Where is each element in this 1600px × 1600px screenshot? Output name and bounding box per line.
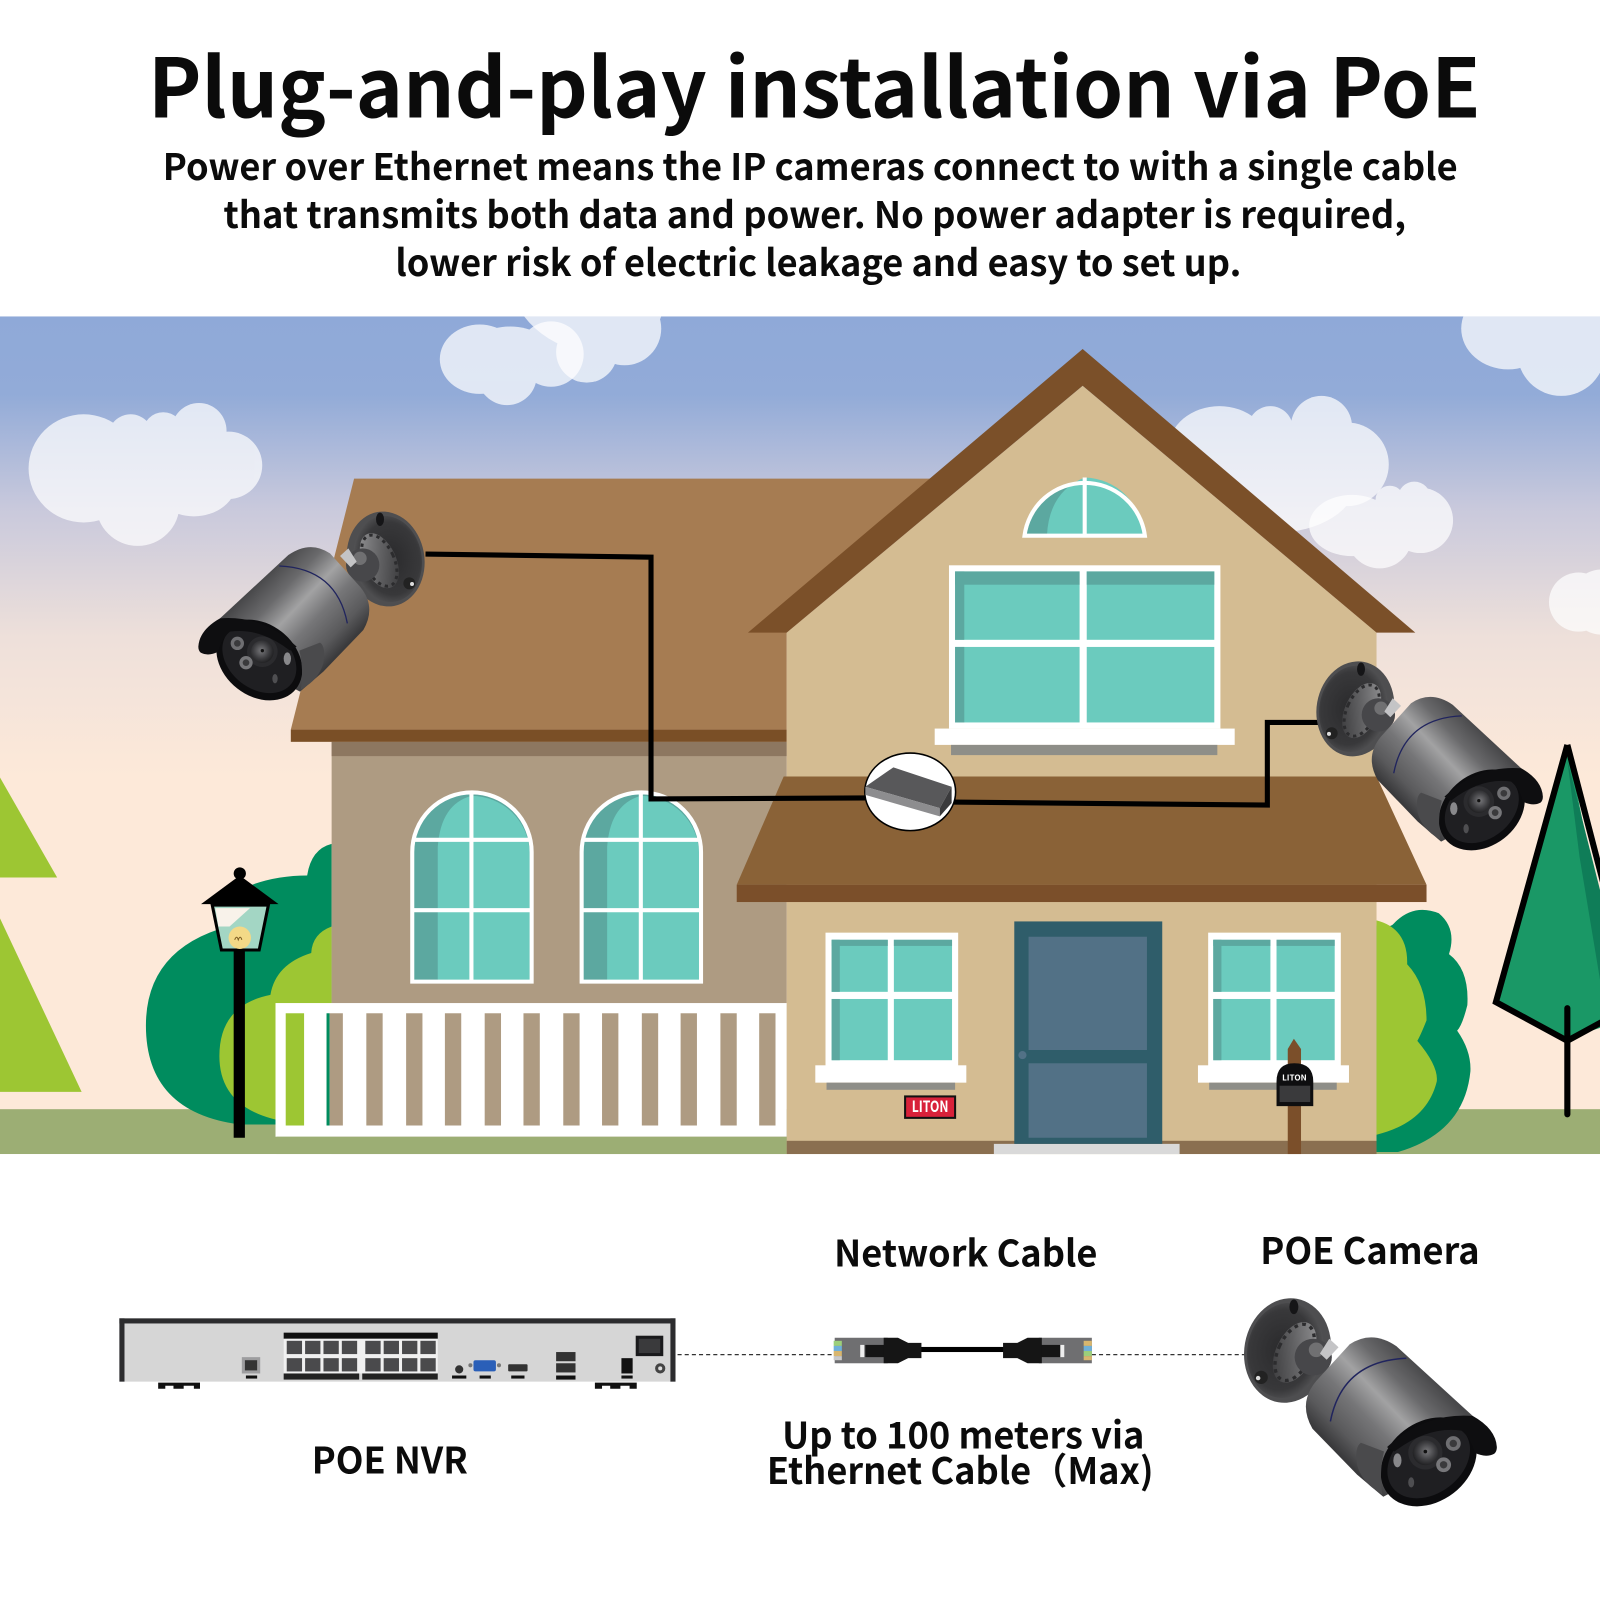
roof: rear section bbox=[291, 479, 939, 730]
half-round attic window bbox=[1024, 478, 1145, 536]
label: POE NVR: POE NVR bbox=[312, 1430, 468, 1484]
cloud: over gable bbox=[1309, 482, 1453, 568]
wall: rear section bbox=[332, 742, 787, 1109]
cable: switch to right camera bbox=[952, 722, 1321, 805]
subtitle text block: Power over Ethernet means the IP cameras connect to with a single cable bbox=[163, 137, 1458, 191]
label: network cable: Network Cable bbox=[834, 1223, 1097, 1277]
lower left window bbox=[815, 933, 966, 1090]
cloud: top centre front bbox=[440, 321, 584, 405]
switch callout bbox=[865, 753, 956, 831]
roof: gable bbox=[748, 349, 1415, 633]
tree: right bbox=[1496, 745, 1600, 1114]
device: POE NVR rear panel bbox=[119, 1318, 676, 1389]
cloud: top right bbox=[1461, 316, 1600, 396]
tree: left light green bbox=[0, 778, 82, 1092]
label: cable distance: Up to 100 meters via bbox=[782, 1405, 1144, 1459]
cloud: behind gable bbox=[1168, 396, 1389, 533]
title: Plug-and-play installation via PoE bbox=[148, 22, 1481, 141]
dashed connection lines bbox=[678, 1354, 1245, 1356]
label: POE camera: POE Camera bbox=[1260, 1221, 1480, 1275]
LITON sign: LITON bbox=[912, 1095, 948, 1117]
bush: right bbox=[1377, 910, 1470, 1152]
subtitle text block bbox=[163, 137, 1458, 287]
device: POE camera bbox=[1236, 1291, 1497, 1525]
roof: porch bbox=[737, 777, 1427, 885]
lamp post bbox=[201, 867, 279, 1138]
mailbox: LITON bbox=[1282, 1073, 1307, 1084]
camera: right bbox=[1316, 661, 1543, 850]
sky background bbox=[0, 316, 1600, 1154]
arched window 1 bbox=[412, 792, 532, 982]
lower right window bbox=[1198, 933, 1349, 1090]
cable: left camera to switch bbox=[426, 554, 867, 799]
subtitle text block: lower risk of electric leakage and easy to set up. bbox=[395, 233, 1241, 287]
mailbox bbox=[1277, 1039, 1313, 1154]
subtitle text block: that transmits both data and power. No power adapter is required, bbox=[223, 185, 1406, 239]
door bbox=[1014, 921, 1162, 1144]
wall: main house bbox=[787, 386, 1377, 786]
fence bbox=[276, 1003, 787, 1137]
large upper window bbox=[935, 565, 1235, 755]
cloud: top centre back bbox=[524, 316, 662, 383]
label: cable distance: Ethernet Cable（Max) bbox=[767, 1441, 1154, 1495]
base and step bbox=[787, 1141, 1377, 1154]
cloud: upper left bbox=[29, 403, 262, 546]
arched window 2 bbox=[582, 792, 701, 982]
label: cable distance bbox=[767, 1405, 1154, 1495]
cloud: far right bbox=[1549, 569, 1600, 635]
device: network cable bbox=[834, 1338, 1092, 1363]
panel: house illustration scene bbox=[0, 288, 1600, 1154]
ground bbox=[0, 1109, 1600, 1154]
camera: left bbox=[198, 512, 425, 700]
bush: left bbox=[146, 844, 332, 1124]
